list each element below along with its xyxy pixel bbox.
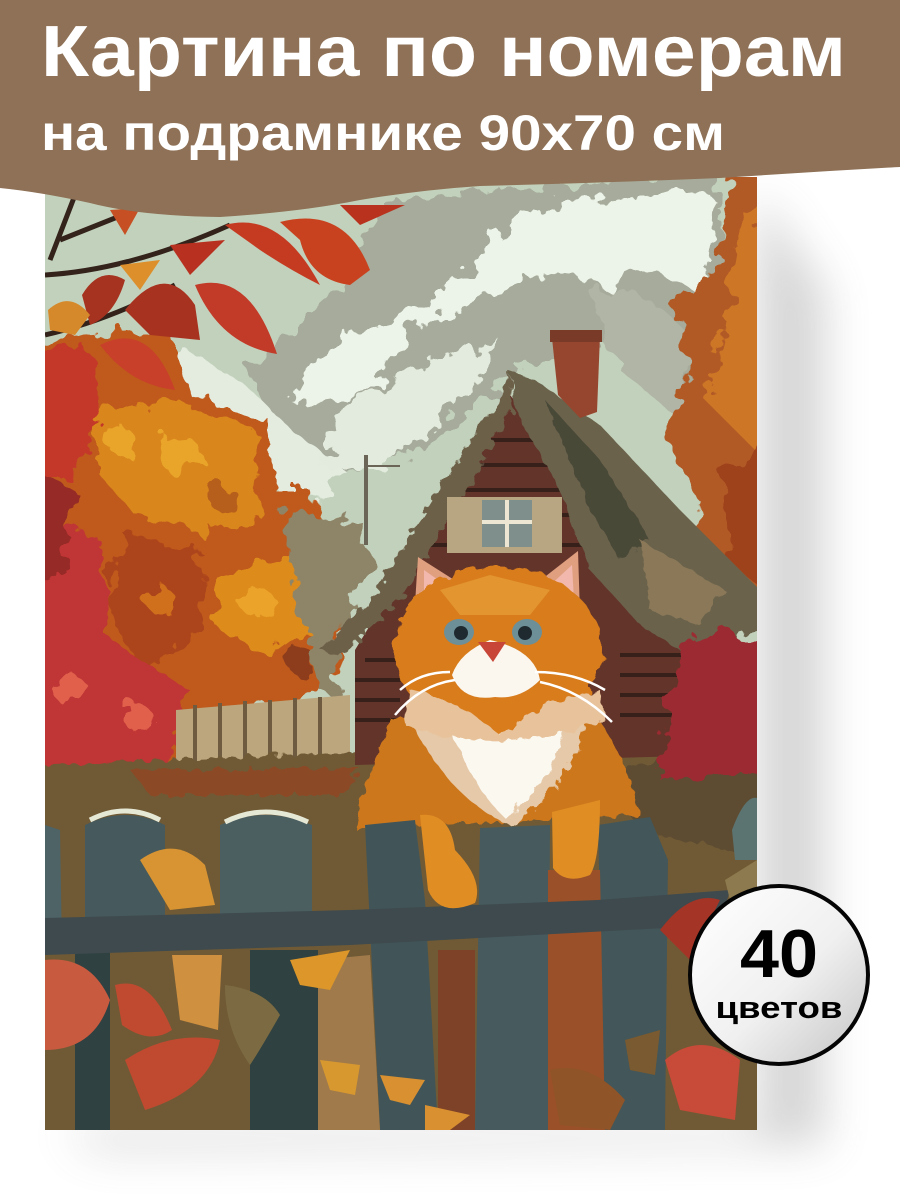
canvas shadow (60, 190, 825, 1150)
title: Картина по номерам (41, 12, 846, 92)
cat body (356, 710, 640, 830)
cottage thatched roof (320, 372, 775, 657)
cottage chimney (552, 335, 600, 418)
badge number: 40 (740, 916, 818, 992)
fence planks behind (45, 825, 62, 918)
cat ears (416, 557, 452, 595)
cat head (394, 566, 602, 734)
right wall red bush (660, 630, 775, 780)
foreground wooden fence (45, 798, 757, 1130)
cottage wall (355, 395, 681, 765)
ground foliage and leaves (45, 849, 757, 1130)
upper left branches and red leaves (45, 195, 405, 390)
cat eyes (444, 619, 474, 645)
cat paws over fence (420, 815, 477, 908)
badge label: цветов (716, 990, 842, 1025)
painting: autumn cottage with ginger cat (30, 170, 775, 1140)
left autumn tree (45, 323, 344, 767)
badge: colors count (690, 886, 868, 1064)
cottage window (447, 497, 562, 553)
distant trees and background fence (176, 455, 400, 770)
painting clouds (170, 170, 720, 510)
cat whiskers (395, 672, 612, 722)
painting sky base (45, 178, 757, 754)
ginger cat (356, 551, 640, 830)
fence crossbar (45, 890, 730, 955)
garden ground (45, 752, 757, 1130)
header band (0, 0, 900, 217)
right autumn tree (664, 177, 757, 587)
cottage (320, 330, 775, 780)
subtitle: на подрамнике 90х70 см (41, 105, 725, 161)
tall fence planks (365, 820, 438, 1130)
cat chest (414, 724, 586, 826)
cat nose (478, 642, 506, 662)
cat muzzle (452, 640, 540, 698)
